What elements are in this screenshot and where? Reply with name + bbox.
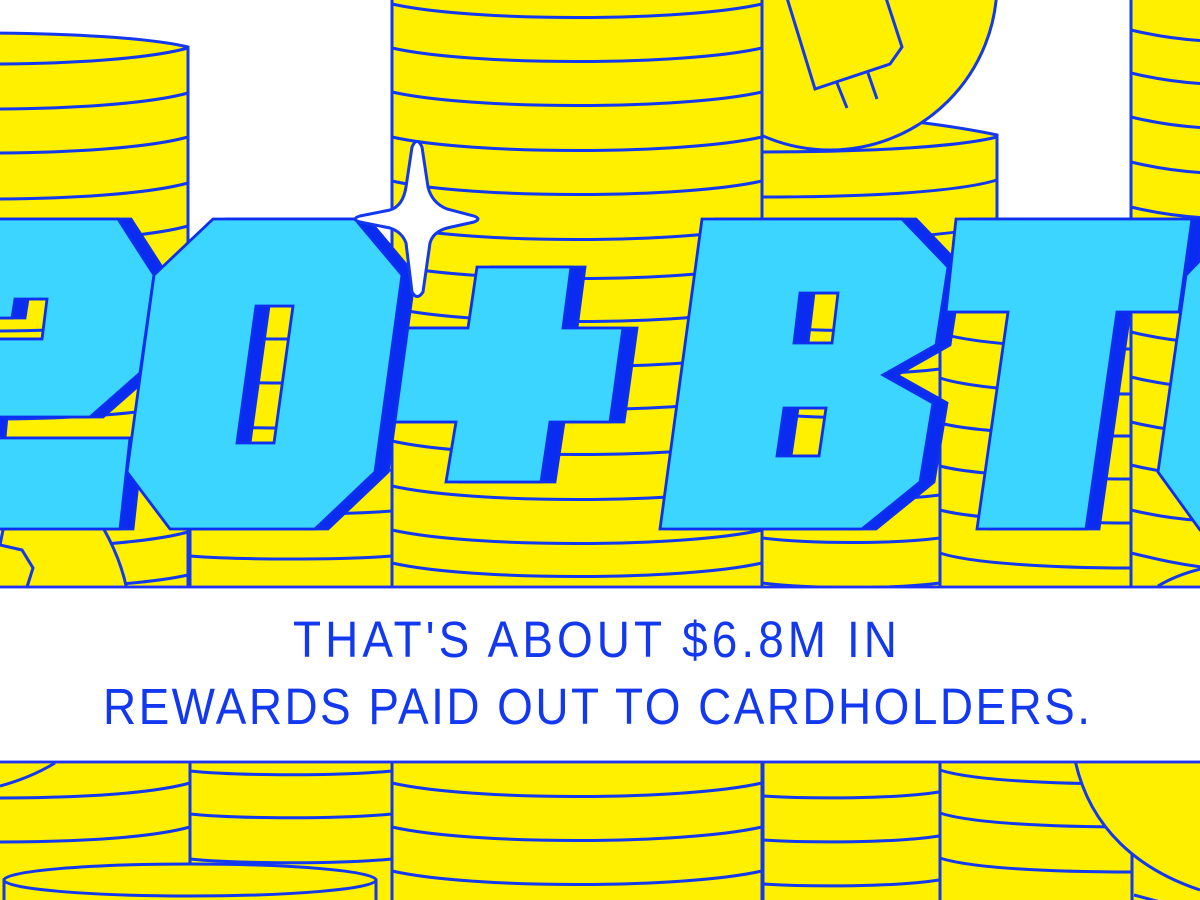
- coin stack: centre column: [392, 0, 762, 590]
- letter: 0: [127, 219, 415, 529]
- background: lower coin stacks: [0, 760, 1200, 900]
- letter: T: T: [1000, 499, 1001, 501]
- letter: 2: 2: [40, 499, 41, 501]
- banner: white caption strip: [0, 587, 1200, 762]
- lower stack: fifth column: [940, 760, 1132, 900]
- letter: B: B: [700, 499, 701, 501]
- letter: 0: 0: [200, 499, 201, 501]
- coin stack: far right: [1131, 0, 1200, 590]
- background: upper coin stacks: [0, 0, 1200, 590]
- headline: 20+ BTC: [0, 219, 1200, 530]
- caption line 2: REWARDS PAID OUT TO CARDHOLDERS.: [103, 679, 1090, 736]
- coin: large bitcoin coin at top: [663, 0, 997, 150]
- coin stack: fifth column: [940, 300, 1131, 590]
- coin stack: fourth lower column: [762, 280, 940, 590]
- coin stack: third wide column: [762, 120, 997, 590]
- lower stack: far left: [0, 760, 190, 900]
- lower stack: centre column: [392, 760, 762, 900]
- icon: sparkle star: [355, 142, 478, 296]
- small front coin on lower left: [4, 864, 376, 900]
- letter: 2: [0, 219, 167, 529]
- letter: T: [946, 219, 1200, 529]
- letter: B: [660, 219, 962, 529]
- coin: bottom left: [0, 490, 127, 590]
- letter: C: [1158, 219, 1200, 530]
- lower stack: second column: [190, 760, 392, 900]
- symbol: plus: +: [500, 399, 501, 401]
- symbol: plus: [380, 267, 637, 482]
- coin: lower right: [1075, 760, 1200, 895]
- letter: C: C: [1195, 499, 1196, 501]
- lower stack: fourth column: [763, 760, 940, 900]
- caption line 1: THAT'S ABOUT $6.8M IN: [293, 612, 897, 669]
- coin stack: far left: [0, 33, 188, 590]
- coin stack: second column: [190, 280, 392, 590]
- lower stack: far right: [1132, 850, 1200, 900]
